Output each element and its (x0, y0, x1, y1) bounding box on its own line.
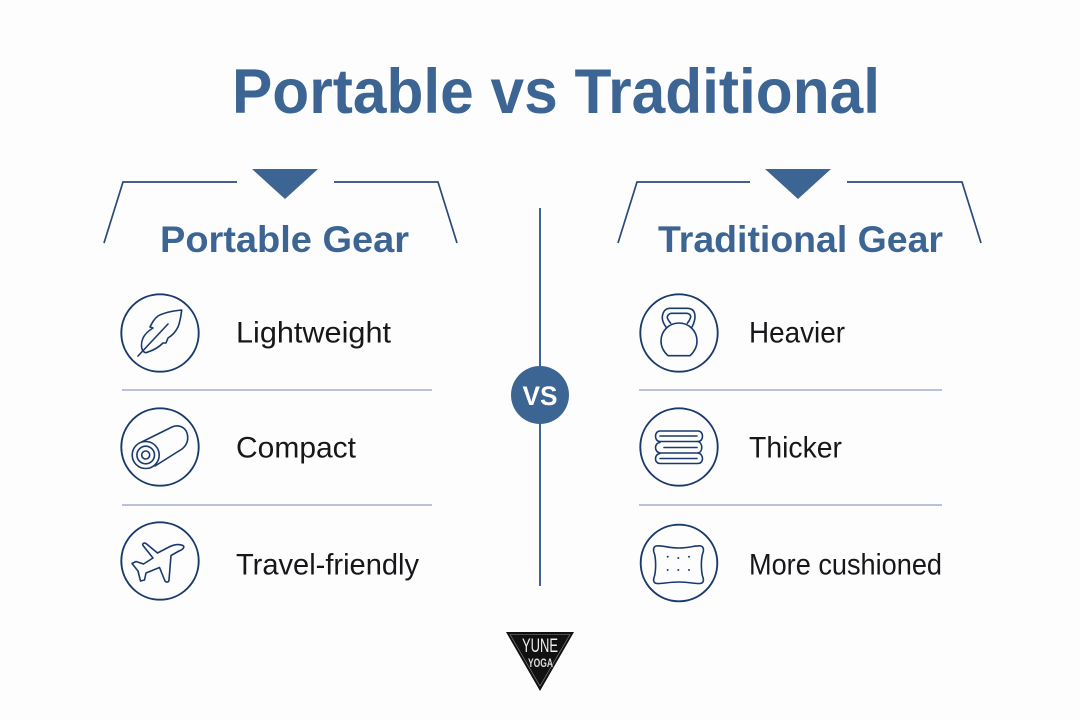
icon: rolled mat (121, 408, 199, 486)
header bracket: portable (104, 169, 457, 243)
header bracket: traditional (618, 169, 981, 243)
icon: feather (121, 294, 199, 372)
panel: portable gear (104, 169, 457, 600)
logo: yune yoga: YUNE (522, 636, 558, 657)
heading: portable gear: Portable Gear (160, 219, 409, 260)
title: Portable vs Traditional (232, 57, 880, 127)
icon: folded towels (640, 408, 718, 486)
center divider with vs badge: VS (522, 381, 558, 411)
label: thicker: Thicker (749, 432, 842, 464)
label: compact: Compact (236, 432, 357, 464)
center divider with vs badge (511, 208, 569, 586)
icon: airplane (121, 522, 199, 600)
heading: traditional gear: Traditional Gear (658, 219, 943, 260)
icon: kettlebell (640, 294, 718, 372)
label: heavier: Heavier (749, 316, 845, 350)
logo: yune yoga: YOGA (528, 656, 553, 670)
label: lightweight: Lightweight (236, 316, 392, 350)
logo: yune yoga (506, 632, 574, 691)
label: more cushioned: More cushioned (749, 548, 942, 582)
label: travel-friendly: Travel-friendly (236, 548, 419, 582)
panel: traditional gear (618, 169, 981, 601)
icon: cushion (641, 525, 717, 601)
